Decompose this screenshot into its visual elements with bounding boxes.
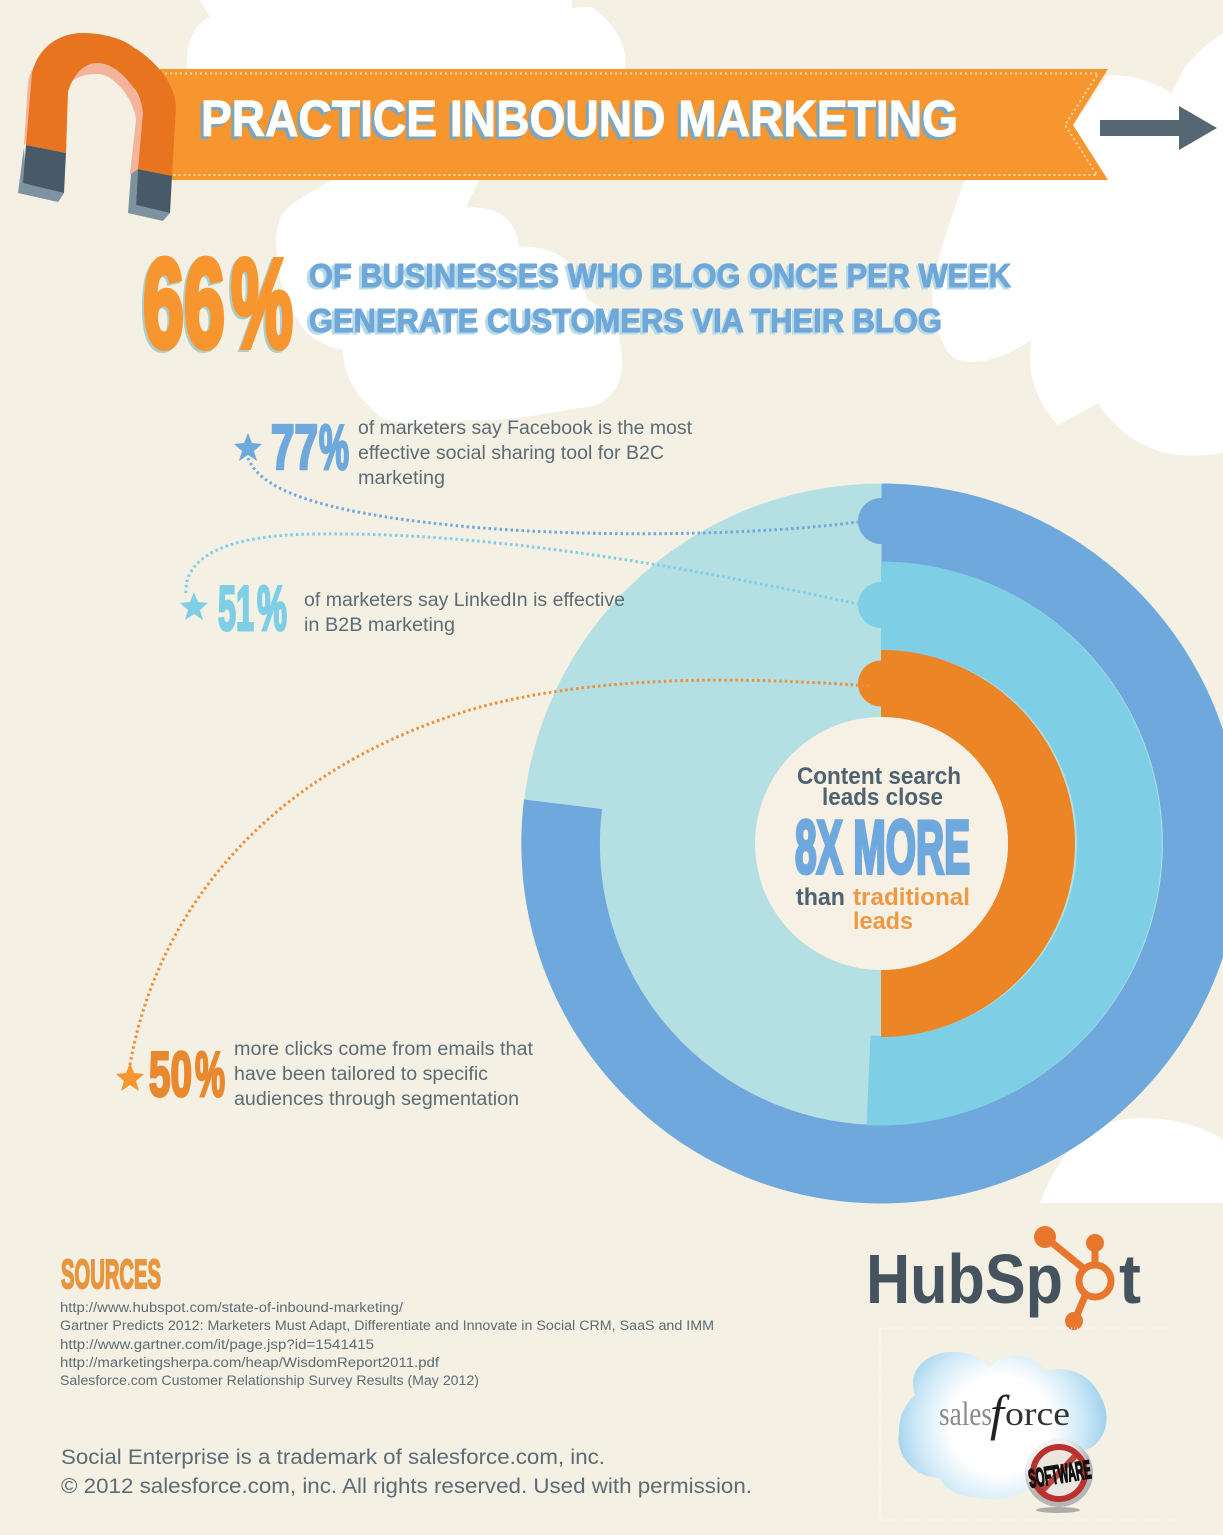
sources list: Salesforce.com Customer Relationship Survey Results (May 2012): [60, 1373, 479, 1388]
dotted salesforce frame: [880, 1328, 1180, 1520]
text: SOFTWARE: [1026, 1454, 1093, 1494]
stat: 77% Facebook: [234, 413, 693, 489]
big stat: 66%: 66: [143, 233, 225, 374]
HubSpot logo: [866, 1226, 1141, 1330]
sources list: http://www.hubspot.com/state-of-inbound-marketing/: [60, 1300, 403, 1315]
stat: 77% Facebook: marketing: [358, 468, 445, 489]
big stat: 66%: 66: [141, 235, 223, 376]
big stat: 66%: %: [231, 233, 293, 374]
center text: 8X MORE: [795, 805, 970, 889]
stat: 77% Facebook: effective social sharing tool for B2C: [358, 443, 664, 464]
stat heading: GENERATE CUSTOMERS VIA THEIR BLOG: [309, 302, 942, 339]
stat: 50% email: 50: [149, 1040, 192, 1110]
stat: 50% email: audiences through segmentation: [234, 1089, 519, 1110]
background clouds: [187, 0, 1223, 1203]
sources list: http://marketingsherpa.com/heap/WisdomReport2011.pdf: [60, 1355, 439, 1370]
HubSpot logo: HubSp: [866, 1240, 1063, 1318]
stat heading: OF BUSINESSES WHO BLOG ONCE PER WEEK: [309, 257, 1011, 294]
sources list: http://www.gartner.com/it/page.jsp?id=1541415: [60, 1337, 374, 1352]
arrow: [1100, 106, 1217, 150]
stat heading: GENERATE CUSTOMERS VIA THEIR BLOG: [306, 304, 940, 341]
stat: 50% email: have been tailored to specific: [234, 1064, 488, 1085]
stat: 51% LinkedIn: 51: [218, 574, 254, 644]
center text: leads close: [822, 784, 943, 811]
big stat: 66%: %: [229, 235, 291, 376]
stat: 51% LinkedIn: of marketers say LinkedIn is effective: [304, 590, 625, 611]
salesforce logo: [898, 1352, 1107, 1499]
banner ribbon: [160, 69, 1108, 180]
connector: LinkedIn stat to chart: [186, 534, 858, 604]
stat: 50% email: more clicks come from emails that: [234, 1039, 534, 1060]
center text: Content search: [797, 763, 961, 790]
sources list: Gartner Predicts 2012: Marketers Must Adapt, Differentiate and Innovate in Social CRM, SaaS and IMM: [60, 1318, 714, 1333]
connector: Facebook stat to chart: [248, 458, 858, 534]
stat heading: OF BUSINESSES WHO BLOG ONCE PER WEEK: [306, 259, 1009, 296]
stat: 51% LinkedIn: [180, 574, 625, 644]
stat: 50% email: [116, 1039, 534, 1110]
icon: magnet: [18, 33, 176, 221]
title: PRACTICE INBOUND MARKETING: [198, 93, 955, 150]
stat: 50% email: %: [195, 1040, 225, 1110]
HubSpot logo: t: [1119, 1240, 1141, 1318]
center text: than: [796, 884, 845, 911]
stat: 77% Facebook: %: [319, 413, 349, 483]
title: PRACTICE INBOUND MARKETING: [201, 90, 958, 147]
center text: traditional: [853, 884, 970, 911]
donut chart: [521, 484, 1223, 1204]
stat: 77% Facebook: 77: [271, 413, 318, 483]
salesforce logo: f: [990, 1385, 1010, 1441]
text: SOURCES: [61, 1251, 161, 1297]
stat: 77% Facebook: of marketers say Facebook is the most: [358, 418, 693, 439]
salesforce logo: sales: [939, 1396, 992, 1433]
footer legal text: Social Enterprise is a trademark of salesforce.com, inc.: [61, 1446, 605, 1469]
no software badge: [1025, 1439, 1093, 1513]
stat: 51% LinkedIn: in B2B marketing: [304, 615, 455, 636]
stat: 51% LinkedIn: %: [257, 574, 287, 644]
footer legal text: © 2012 salesforce.com, inc. All rights reserved. Used with permission.: [61, 1475, 752, 1498]
center text: [795, 763, 970, 935]
stat heading: [306, 257, 1011, 341]
footer legal text: [61, 1446, 752, 1498]
connector: email stat to chart: [130, 680, 872, 1065]
salesforce logo: orce: [1005, 1396, 1070, 1433]
center text: leads: [853, 908, 913, 935]
sources list: [60, 1300, 714, 1388]
